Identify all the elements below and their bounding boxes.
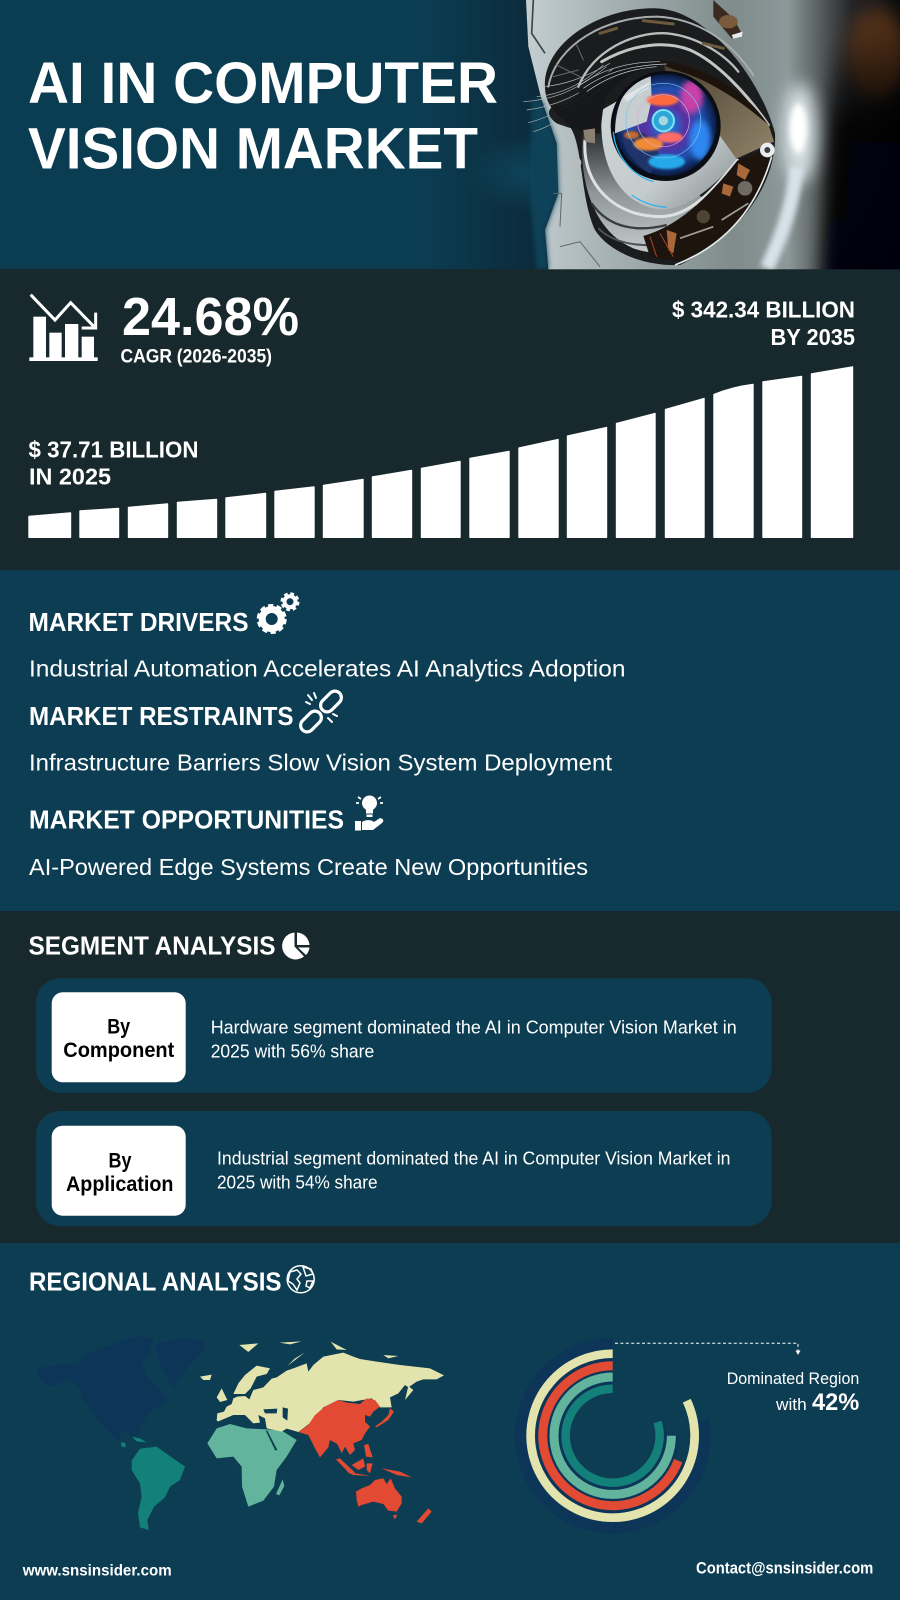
lashes xyxy=(523,63,627,132)
section background: market size xyxy=(0,269,900,570)
label box: Application xyxy=(66,1173,174,1196)
label box xyxy=(52,1126,186,1216)
heading: market opportunities: MARKET OPPORTUNITIES xyxy=(29,804,344,834)
callout: dominated region: Dominated Region xyxy=(727,1370,859,1388)
radial bar chart xyxy=(523,1346,703,1526)
map: Africa and Middle East xyxy=(207,1424,297,1507)
2035 market value: $ 342.34 BILLION xyxy=(672,296,855,322)
map: Europe and North Asia xyxy=(200,1341,444,1432)
hero image: robotic eye xyxy=(488,0,900,270)
heading: market drivers: MARKET DRIVERS xyxy=(28,607,248,637)
label box: By xyxy=(107,1016,130,1038)
heading: market restraints: MARKET RESTRAINTS xyxy=(29,701,294,731)
icon: bulb in hand xyxy=(355,796,383,830)
description xyxy=(217,1148,730,1192)
2035 market value xyxy=(672,296,855,350)
2025 market value xyxy=(28,436,198,490)
icon: broken chain xyxy=(298,688,344,735)
icon: gears xyxy=(259,594,298,632)
CAGR value: 24.68% xyxy=(122,287,299,347)
callout: dominated region: 42% xyxy=(812,1389,859,1416)
title xyxy=(28,51,498,182)
label box xyxy=(52,992,186,1082)
map: Asia-Pacific xyxy=(298,1398,432,1523)
text: opportunity: AI-Powered Edge Systems Create New Opportunities xyxy=(29,854,588,880)
footer: website: www.snsinsider.com xyxy=(22,1562,172,1579)
map: South America xyxy=(121,1437,185,1530)
bar chart: market growth xyxy=(29,367,852,537)
description: 2025 with 54% share xyxy=(217,1172,378,1192)
section background: market dynamics xyxy=(0,570,900,911)
description: Industrial segment dominated the AI in Computer Vision Market in xyxy=(217,1148,730,1168)
icon: market chart with trend arrow xyxy=(29,295,98,361)
icon: pie chart xyxy=(282,932,310,959)
label box: Component xyxy=(63,1039,174,1062)
callout: dominated region: with xyxy=(775,1396,807,1414)
exposed mechanics xyxy=(643,147,771,262)
label box: By xyxy=(108,1150,132,1173)
eye socket xyxy=(545,8,775,265)
CAGR label: CAGR (2026-2035) xyxy=(120,346,272,368)
description: Hardware segment dominated the AI in Computer Vision Market in xyxy=(211,1018,737,1038)
section background: segment analysis xyxy=(0,911,900,1243)
icon: globe xyxy=(287,1266,314,1293)
heading: regional analysis: REGIONAL ANALYSIS xyxy=(29,1266,282,1296)
lower lid xyxy=(585,140,738,217)
text: driver: Industrial Automation Accelerates AI Analytics Adoption xyxy=(29,656,626,682)
footer: contact: Contact@snsinsider.com xyxy=(696,1559,873,1577)
panel: by component xyxy=(36,978,772,1093)
silver eyeball xyxy=(601,101,736,210)
description: 2025 with 56% share xyxy=(211,1042,374,1062)
world map xyxy=(37,1335,444,1530)
section background: header xyxy=(0,0,900,269)
arrow: dashed connector xyxy=(615,1343,800,1355)
section background: regional analysis xyxy=(0,1243,900,1600)
2025 market value: IN 2025 xyxy=(29,464,111,490)
panel: by application xyxy=(36,1111,772,1226)
callout: dominated region xyxy=(727,1370,859,1416)
map: North America xyxy=(37,1335,205,1442)
iris xyxy=(611,71,721,181)
eyelid xyxy=(664,66,774,158)
description xyxy=(211,1018,737,1062)
2035 market value: BY 2035 xyxy=(770,324,855,350)
title: AI IN COMPUTER xyxy=(28,51,498,116)
heading: segment analysis: SEGMENT ANALYSIS xyxy=(28,930,276,960)
title: VISION MARKET xyxy=(28,116,478,182)
2025 market value: $ 37.71 BILLION xyxy=(28,436,198,462)
text: restraint: Infrastructure Barriers Slow Vision System Deployment xyxy=(29,750,613,776)
